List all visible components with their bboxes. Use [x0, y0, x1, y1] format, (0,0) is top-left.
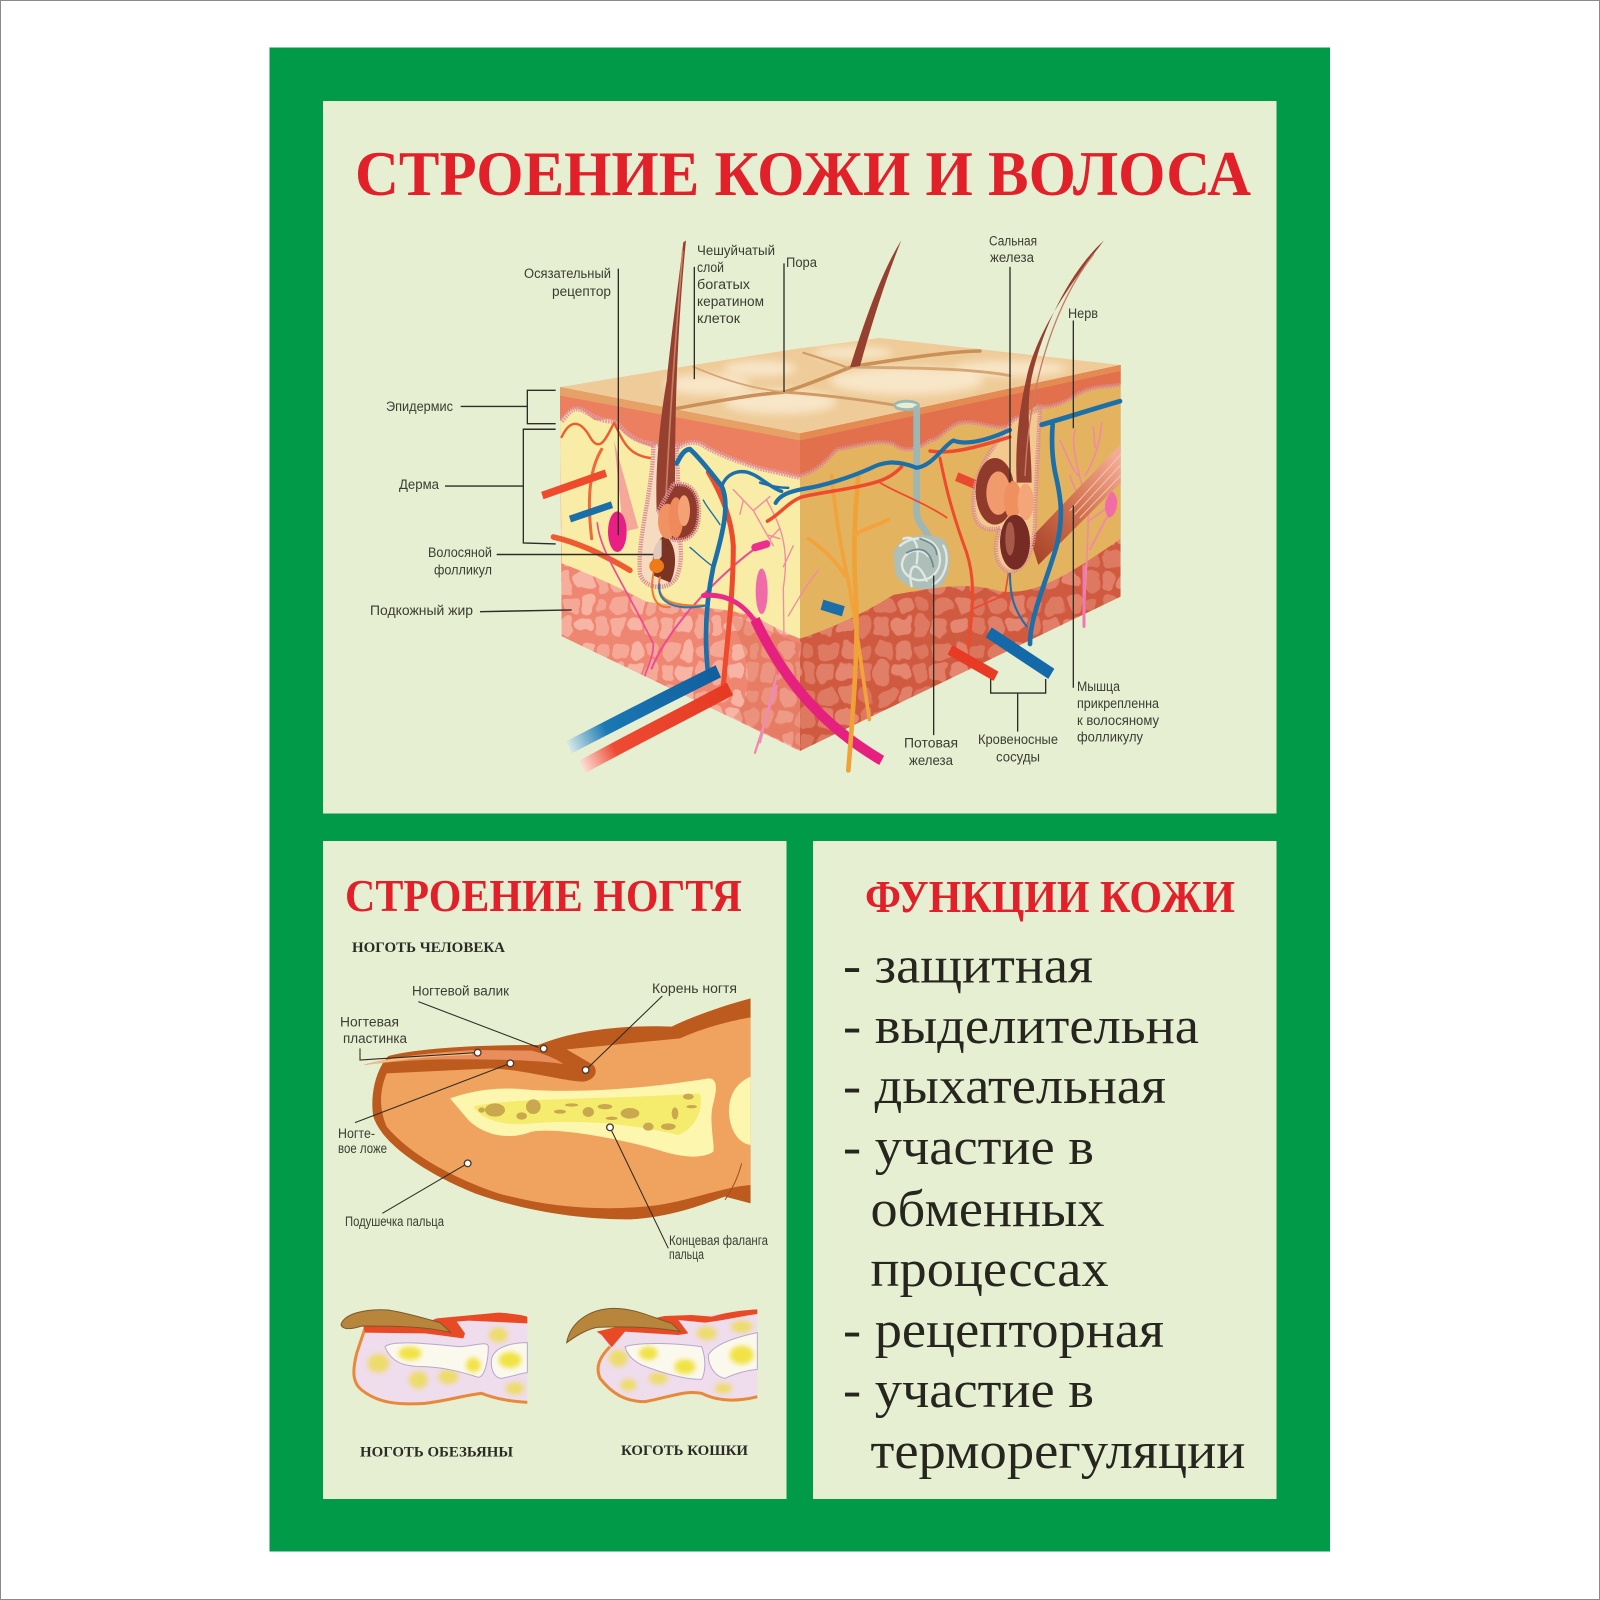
skin diagram labels: Осязательный	[524, 266, 611, 281]
functions list: - участие в	[843, 1119, 1094, 1176]
orange nerves	[808, 476, 888, 770]
leader lines and brackets	[445, 263, 1073, 735]
skin diagram labels: к волосяному	[1077, 713, 1159, 728]
right face of skin	[800, 365, 1121, 751]
nail diagram labels: Ногте-	[338, 1126, 375, 1141]
skin diagram labels: рецептор	[552, 284, 611, 299]
skin diagram labels: Дерма	[399, 477, 439, 492]
skin diagram labels: железа	[909, 753, 953, 768]
skin block illustration	[445, 241, 1133, 770]
skin diagram labels: прикрепленна	[1077, 696, 1159, 711]
pink nerve	[703, 595, 882, 760]
nail diagram labels: Подушечка пальца	[345, 1214, 444, 1229]
functions list: процессах	[870, 1241, 1108, 1298]
skin diagram labels: Кровеносные	[978, 732, 1058, 747]
blue and red vessels, left	[569, 449, 782, 767]
panel: skin functions	[813, 841, 1276, 1499]
functions list: - участие в	[843, 1362, 1094, 1419]
light pink nerve branches	[760, 423, 1117, 742]
panel: nail structure	[323, 841, 786, 1499]
skin diagram labels	[370, 234, 1159, 768]
caption: monkey nail: НОГОТЬ ОБЕЗЬЯНЫ	[360, 1444, 513, 1460]
caption: human nail: НОГОТЬ ЧЕЛОВЕКА	[352, 940, 506, 956]
functions list: - выделительна	[843, 998, 1199, 1055]
functions list: - защитная	[843, 938, 1093, 994]
skin diagram labels: Нерв	[1068, 306, 1098, 321]
skin diagram labels: Подкожный жир	[370, 603, 473, 618]
panel: skin and hair structure	[323, 101, 1276, 814]
monkey nail diagram	[341, 1310, 527, 1404]
functions list: терморегуляции	[870, 1423, 1246, 1480]
sweat gland	[893, 401, 949, 589]
skin diagram labels: Сальная	[989, 234, 1037, 248]
blue and red vessels, right	[760, 401, 1120, 676]
skin diagram labels: Волосяной	[428, 545, 492, 560]
heading: skin functions: ФУНКЦИИ КОЖИ	[865, 871, 1235, 922]
cat claw diagram	[567, 1308, 757, 1402]
skin diagram labels: клеток	[697, 311, 740, 326]
nail diagram labels: Ногтевой валик	[412, 984, 509, 998]
nail diagram labels: пластинка	[343, 1031, 407, 1046]
human nail diagram	[355, 996, 751, 1248]
follicle with gland, right	[973, 241, 1104, 572]
short hair	[850, 241, 901, 368]
hair and follicle, left	[640, 241, 707, 607]
nail diagram labels: вое ложе	[338, 1141, 387, 1156]
skin diagram labels: слой	[697, 260, 724, 275]
title: СТРОЕНИЕ КОЖИ И ВОЛОСА	[355, 138, 1251, 209]
arrector muscle	[1030, 444, 1121, 565]
nail diagram labels: Концевая фаланга	[669, 1233, 768, 1248]
skin diagram labels: фолликул	[434, 562, 492, 578]
leader lines and markers	[355, 996, 668, 1248]
green frame	[270, 48, 1330, 1552]
skin diagram labels: фолликулу	[1077, 730, 1143, 744]
skin diagram labels: богатых	[697, 277, 750, 292]
phalanx marrow spots	[478, 1094, 697, 1131]
left dermis vessels and receptors	[542, 423, 780, 753]
functions list: - рецепторная	[843, 1302, 1164, 1359]
functions list: обменных	[870, 1181, 1104, 1238]
right dermis structures	[760, 241, 1121, 770]
left face of skin	[560, 387, 800, 751]
caption: cat claw: КОГОТЬ КОШКИ	[621, 1443, 749, 1459]
functions list	[843, 938, 1246, 1480]
skin diagram labels: Потовая	[904, 736, 958, 750]
skin diagram labels: Чешуйчатый	[697, 243, 775, 258]
nail diagram labels: пальца	[669, 1247, 704, 1262]
small vessel stubs	[822, 477, 977, 611]
skin diagram labels: Пора	[786, 255, 817, 270]
nail diagram labels: Корень ногтя	[652, 981, 737, 996]
nail diagram labels	[338, 981, 768, 1262]
top face of skin	[560, 338, 1121, 433]
skin diagram labels: сосуды	[996, 750, 1040, 764]
skin diagram labels: железа	[990, 250, 1034, 265]
skin diagram labels: Мышца	[1077, 679, 1120, 694]
skin diagram labels: Эпидермис	[386, 399, 453, 414]
heading: nail structure: СТРОЕНИЕ НОГТЯ	[345, 870, 742, 921]
nail diagram labels: Ногтевая	[340, 1014, 399, 1030]
skin diagram labels: кератином	[697, 294, 764, 309]
functions list: - дыхательная	[843, 1058, 1166, 1115]
